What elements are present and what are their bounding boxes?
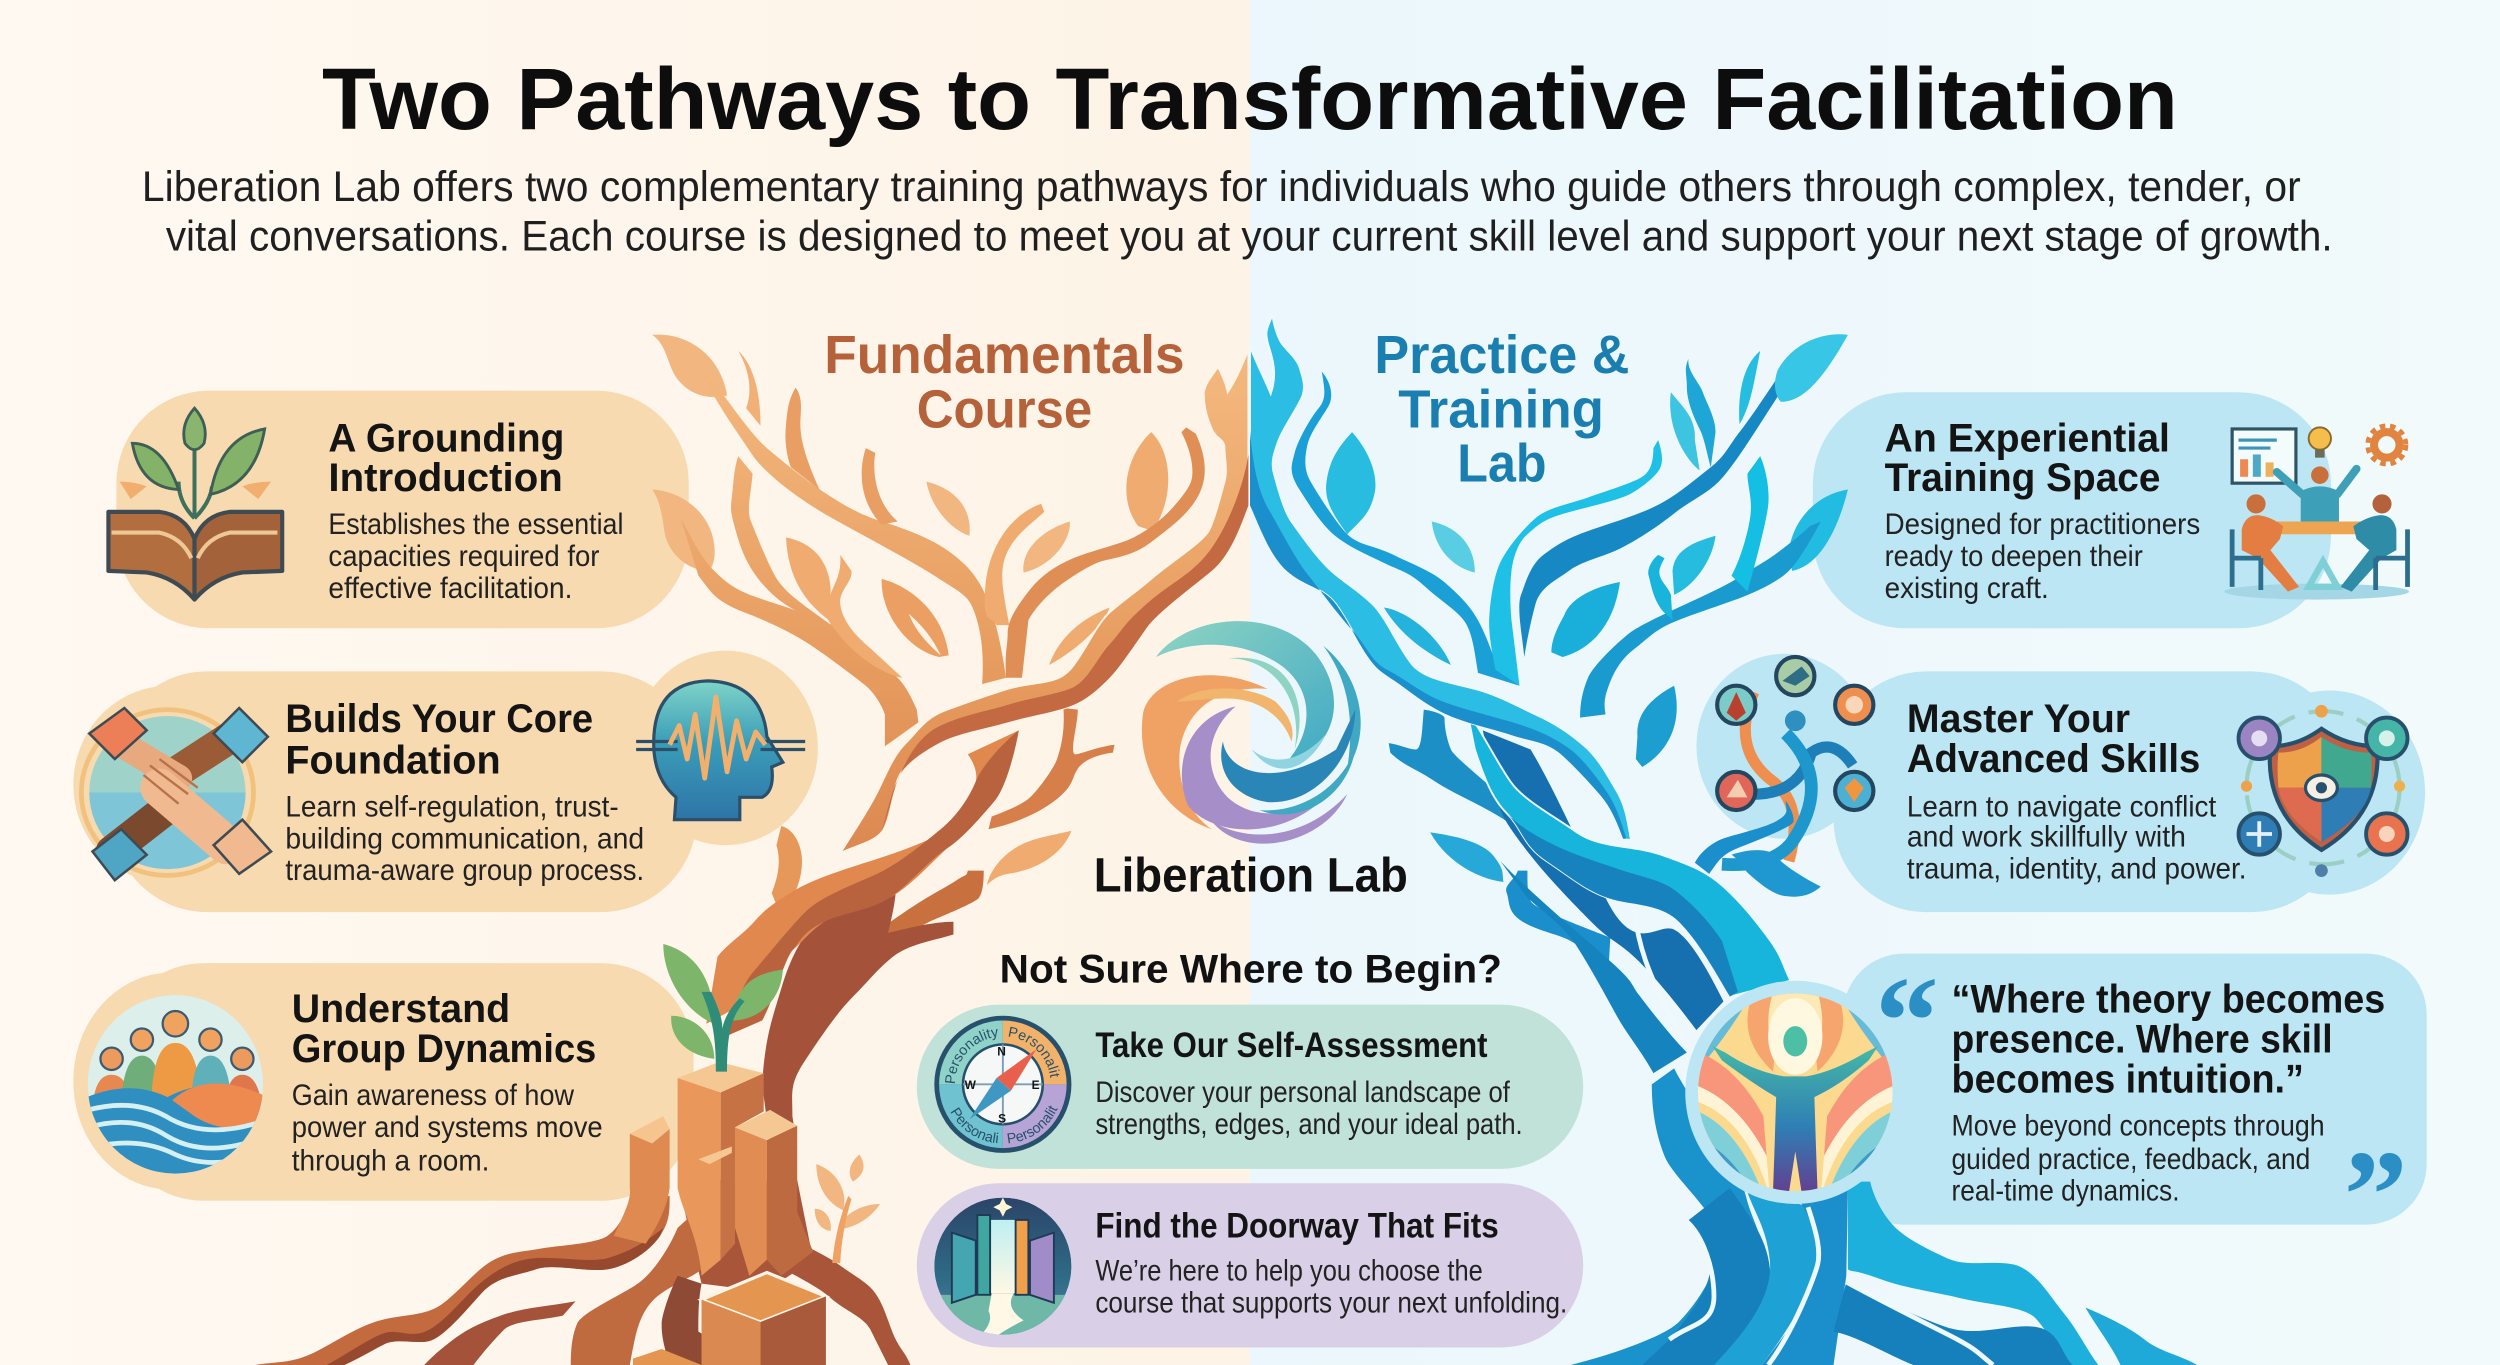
woven strand shade <box>1507 813 1738 997</box>
text block <box>328 508 623 605</box>
trunk left strand <box>1570 1068 1764 1365</box>
panel: Understand Group Dynamics <box>73 963 694 1201</box>
text block: course that supports your next unfolding. <box>1095 1286 1567 1319</box>
twig near D <box>826 555 902 678</box>
text block: Learn to navigate conflict <box>1907 790 2216 823</box>
panel: A Grounding Introduction <box>108 391 689 628</box>
branch C' <box>1489 440 1662 686</box>
intro text: Liberation Lab offers two complementary training pathways for individuals who guide others through complex, tender, or <box>142 163 2301 210</box>
leaf top <box>1326 432 1375 534</box>
icon: personality compass: Personality <box>1007 1105 1058 1144</box>
root centre dark <box>662 1276 749 1365</box>
root third <box>571 1212 710 1365</box>
leaf right <box>1789 490 1848 571</box>
main strand <box>840 349 1248 853</box>
woven strand shade <box>725 730 1019 1037</box>
vine <box>772 826 802 917</box>
icon: personality compass: E <box>1032 1078 1040 1092</box>
leaf low <box>1636 686 1677 767</box>
text block: Designed for practitioners <box>1885 508 2200 541</box>
text block <box>1095 1254 1567 1319</box>
branch B' <box>1519 365 1797 657</box>
panel: self assessment <box>916 1004 1584 1169</box>
loop twig <box>1389 710 1511 821</box>
heading: Advanced Skills <box>1907 737 2200 781</box>
small orange sprout <box>815 1155 880 1263</box>
text block: We’re here to help you choose the <box>1095 1254 1483 1287</box>
logo name: Liberation Lab <box>1094 849 1408 902</box>
heading <box>1885 416 2170 500</box>
thin leaf <box>1739 351 1760 424</box>
lower twig <box>861 871 984 950</box>
stump left <box>614 1116 670 1244</box>
twig mid <box>862 448 898 525</box>
text block: through a room. <box>292 1144 489 1177</box>
stem leaf <box>1732 850 1821 897</box>
heading: Foundation <box>285 738 501 782</box>
branch C <box>681 518 918 746</box>
text block: Learn self-regulation, trust- <box>285 790 619 823</box>
title: Two Pathways to Transformative Facilitation <box>322 50 2178 148</box>
icon: shield with skill badges <box>2239 705 2408 877</box>
text block: building communication, and <box>285 822 644 855</box>
small leaf under main <box>1384 608 1451 665</box>
root far right <box>2085 1308 2197 1365</box>
text block: and work skillfully with <box>1907 821 2186 854</box>
panel: Master Your Advanced Skills <box>1696 654 2425 912</box>
stump right <box>698 1110 813 1276</box>
heading: Training Space <box>1885 456 2160 500</box>
heading: Practice & Training Lab: Lab <box>1457 434 1547 494</box>
heading: Not Sure Where to Begin: Not Sure Where to Begin? <box>1000 947 1502 991</box>
icon: skills network <box>1717 657 1873 865</box>
dark strand <box>1483 730 1724 1030</box>
stem from network <box>1695 801 1794 874</box>
quote heading: presence. Where skill <box>1952 1017 2333 1061</box>
right tree: Practice & Training Lab <box>1250 314 2197 1365</box>
text block <box>285 790 644 887</box>
woven strand <box>1467 710 1790 997</box>
text block: Discover your personal landscape of <box>1095 1076 1511 1109</box>
branch B <box>695 360 1006 684</box>
text block: capacities required for <box>328 540 600 573</box>
heading: Master Your <box>1907 697 2130 741</box>
leaf pale <box>1432 521 1475 572</box>
heading: Fundamentals Course: Fundamentals <box>824 325 1185 385</box>
heading: Find the Doorway That Fits <box>1095 1206 1499 1245</box>
heading: Practice & Training Lab: Practice & <box>1374 325 1629 385</box>
lower leaf <box>1430 832 1504 882</box>
root right <box>1848 1182 2098 1365</box>
icon: training room <box>2224 426 2409 600</box>
trunk centre <box>1714 1188 1816 1365</box>
icon: figure with aura <box>1685 981 1905 1204</box>
leaf on D <box>786 537 831 620</box>
trunk centre right <box>1754 1180 1848 1365</box>
logo: swirl <box>1142 621 1361 844</box>
vertical twig <box>1732 456 1769 592</box>
icon: personality compass: S <box>998 1112 1006 1126</box>
main strand <box>1250 314 1631 840</box>
leaf centre <box>1551 582 1620 657</box>
leaf centre <box>926 482 970 536</box>
root left long <box>255 1196 670 1365</box>
text block: trauma-aware group process. <box>285 854 644 887</box>
icon: joined hands <box>81 708 271 880</box>
icon: personality compass: N <box>997 1045 1006 1059</box>
root base <box>678 1180 813 1292</box>
leaf by strand <box>1049 608 1110 665</box>
leaf top right <box>1126 432 1168 531</box>
root left shade <box>327 1228 663 1365</box>
text block <box>1952 1109 2325 1208</box>
leaf top left <box>652 335 727 397</box>
woven strand <box>706 730 1019 1024</box>
heading: Builds Your Core <box>285 697 593 741</box>
icon: personality compass: Personality <box>950 1107 998 1144</box>
icon: personality compass: Personality <box>945 1028 998 1084</box>
text block: trauma, identity, and power. <box>1907 853 2246 886</box>
main strand shade <box>882 454 1248 832</box>
quote heading <box>1952 978 2385 1101</box>
heading: Fundamentals Course <box>824 325 1185 439</box>
panel: quote <box>1843 950 2427 1265</box>
heading <box>285 697 593 782</box>
root right <box>737 1196 910 1365</box>
heading: Practice & Training Lab: Training <box>1398 379 1604 439</box>
leaf centre right <box>1023 521 1070 572</box>
text block: real-time dynamics. <box>1952 1175 2180 1208</box>
background left half <box>0 0 1250 1365</box>
icon: personality compass <box>934 1016 1072 1153</box>
leaf far top right <box>1775 334 1848 402</box>
icon: head with brain wave <box>636 681 805 820</box>
panel: Builds Your Core Foundation <box>73 651 818 912</box>
text block: Establishes the essential <box>328 508 623 541</box>
intro text <box>142 163 2333 259</box>
heading: Introduction <box>328 456 563 500</box>
lower leaf <box>987 831 1071 885</box>
text block: guided practice, feedback, and <box>1952 1143 2310 1176</box>
icon: personality compass: W <box>965 1078 977 1092</box>
icon: doorways <box>934 1198 1071 1339</box>
heading <box>328 416 564 500</box>
leaf mid right <box>1673 536 1716 595</box>
text block: Move beyond concepts through <box>1952 1109 2325 1142</box>
branch D <box>731 456 829 623</box>
left tree: Fundamentals <box>255 335 1248 1365</box>
text block: effective facilitation. <box>328 572 572 605</box>
text block: Gain awareness of how <box>292 1079 575 1112</box>
text block: power and systems move <box>292 1111 603 1144</box>
branch E' <box>1580 521 1821 718</box>
panel: An Experiential Training Space <box>1813 392 2409 628</box>
branch E <box>1006 427 1205 678</box>
icon: opening quote mark: “ <box>1875 950 1939 1092</box>
stump main <box>678 1062 764 1276</box>
text block: strengths, edges, and your ideal path. <box>1095 1108 1523 1141</box>
twig top <box>1686 359 1716 467</box>
side leaf <box>1670 392 1700 470</box>
text block <box>1907 790 2246 886</box>
icon: people on waves <box>88 995 263 1174</box>
loop twig <box>989 708 1114 829</box>
trunk dark <box>1642 1188 1770 1365</box>
thin leaf <box>738 351 761 426</box>
text block <box>292 1079 603 1177</box>
intro text: vital conversations. Each course is designed to meet you at your current skill level and support your next stage of growth. <box>166 212 2333 259</box>
twig upper <box>785 387 820 490</box>
main strand shade <box>1250 431 1626 839</box>
text block: ready to deepen their <box>1885 540 2143 573</box>
icon: book and sprout <box>108 408 282 600</box>
quote heading: “Where theory becomes <box>1952 978 2385 1022</box>
heading: Fundamentals Course: Course <box>917 379 1092 439</box>
short twig <box>1648 555 1673 620</box>
heading <box>1907 697 2200 781</box>
small cube <box>633 1273 826 1365</box>
sapling <box>663 944 783 1072</box>
root lower <box>1834 1282 2073 1365</box>
heading: Group Dynamics <box>292 1027 596 1071</box>
root second <box>424 1301 576 1365</box>
branch D' <box>1292 372 1519 686</box>
heading: Practice & Training Lab <box>1374 325 1629 494</box>
lower twig <box>1506 871 1610 965</box>
heading: A Grounding <box>328 416 564 460</box>
icon: personality compass: Personality <box>1008 1026 1060 1078</box>
icon: closing quote mark: ” <box>2344 1123 2408 1265</box>
text block <box>1095 1076 1523 1141</box>
heading: Take Our Self-Assessment <box>1095 1026 1488 1065</box>
text block: existing craft. <box>1885 572 2049 605</box>
dark trunk <box>762 861 953 1180</box>
twig centre <box>985 504 1044 625</box>
heading: An Experiential <box>1885 416 2170 460</box>
quote heading: becomes intuition.” <box>1952 1057 2304 1101</box>
heading <box>292 987 596 1071</box>
background right half <box>1250 0 2500 1365</box>
strand to trunk <box>1500 861 1687 1073</box>
panel: doorway <box>917 1183 1583 1347</box>
heading: Understand <box>292 987 510 1031</box>
leaf lower centre <box>882 579 949 657</box>
leaf left <box>652 490 715 571</box>
text block <box>1885 508 2200 605</box>
